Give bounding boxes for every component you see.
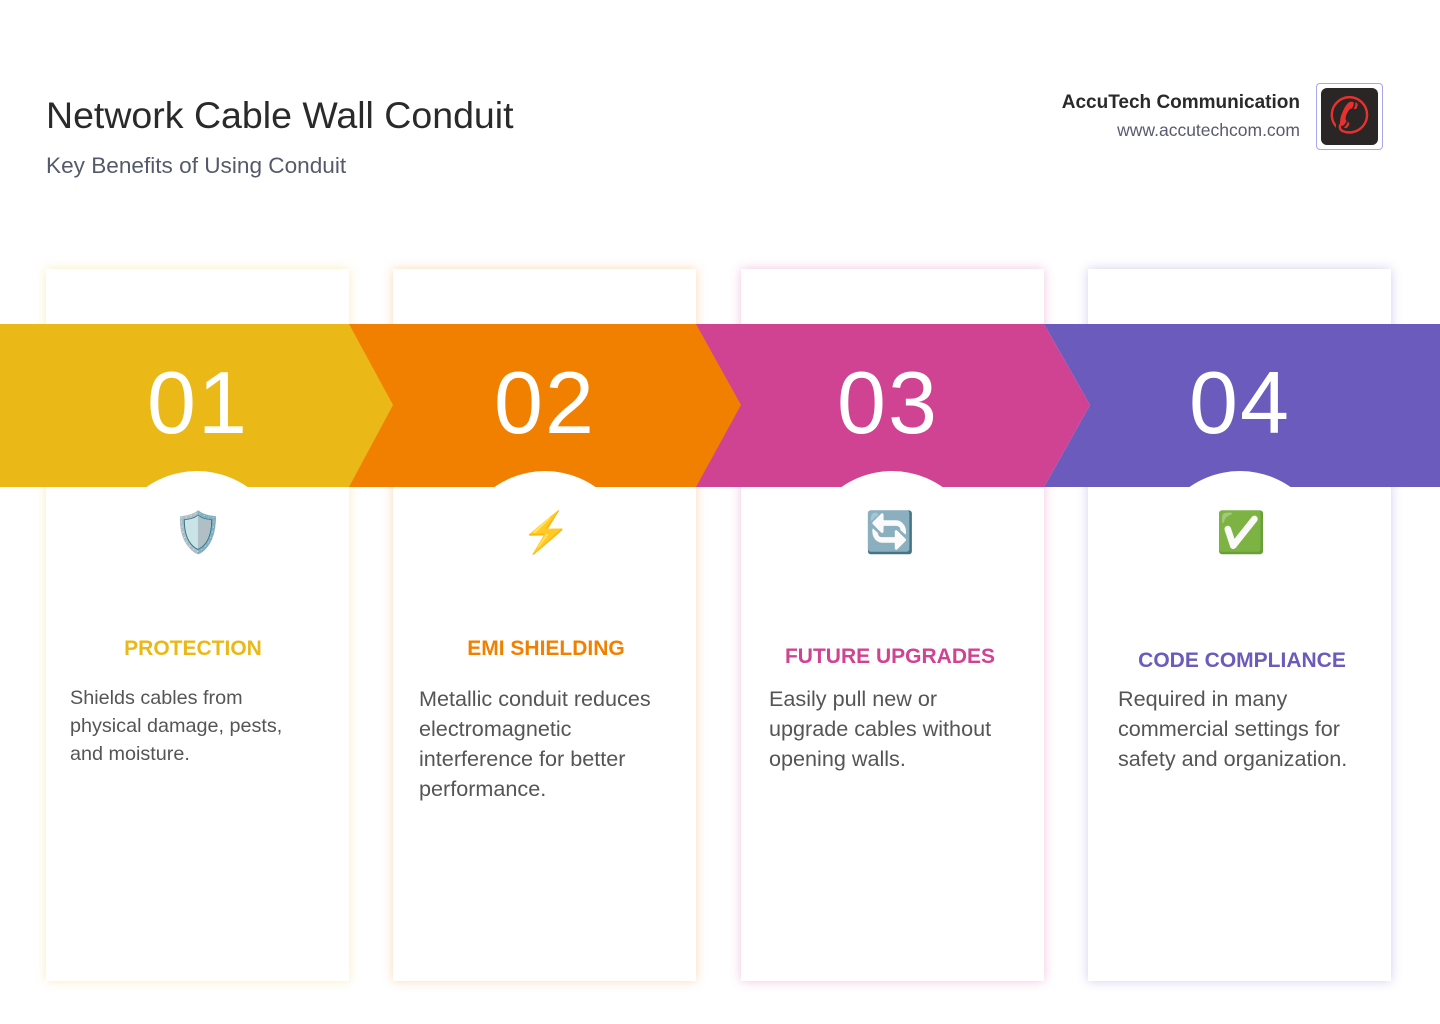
text: future bbox=[769, 686, 991, 771]
subtitle: Key Benefits of Using Conduit bbox=[46, 153, 346, 178]
text: protection: Shields cables from bbox=[70, 687, 243, 709]
icon: shield: 🛡️ bbox=[173, 511, 223, 555]
text: emi: interference for better bbox=[419, 746, 625, 771]
text: protection: and moisture. bbox=[70, 743, 190, 765]
text: code bbox=[1118, 686, 1347, 771]
icon: phone logo: ✆ bbox=[1329, 88, 1370, 144]
text: emi bbox=[419, 686, 651, 801]
text: code: commercial settings for bbox=[1118, 716, 1340, 741]
text: emi: performance. bbox=[419, 776, 546, 801]
icon: check: ✅ bbox=[1216, 511, 1266, 555]
panel: card 2 bbox=[393, 269, 696, 981]
number 02: 02 bbox=[494, 353, 596, 452]
heading: protection: PROTECTION bbox=[124, 637, 262, 660]
text: future: upgrade cables without bbox=[769, 716, 991, 741]
number 03: 03 bbox=[837, 353, 939, 452]
text: future: Easily pull new or bbox=[769, 686, 937, 711]
heading: emi shielding: EMI SHIELDING bbox=[467, 637, 625, 660]
icon: refresh: 🔄 bbox=[865, 511, 915, 555]
text: future: opening walls. bbox=[769, 746, 906, 771]
number 04: 04 bbox=[1189, 353, 1291, 452]
icon: phone logo bbox=[1316, 83, 1383, 150]
number 01: 01 bbox=[147, 353, 249, 452]
panel: card 4 bbox=[1088, 269, 1391, 981]
text: code: safety and organization. bbox=[1118, 746, 1347, 771]
text: emi: Metallic conduit reduces bbox=[419, 686, 651, 711]
brand name: AccuTech Communication bbox=[1062, 92, 1300, 113]
text: code: Required in many bbox=[1118, 686, 1287, 711]
text: protection bbox=[70, 687, 282, 765]
icon: lightning: ⚡ bbox=[521, 511, 571, 555]
text: emi: electromagnetic bbox=[419, 716, 571, 741]
heading: code compliance: CODE COMPLIANCE bbox=[1138, 649, 1346, 672]
heading: future upgrades: FUTURE UPGRADES bbox=[785, 645, 995, 668]
panel: card 3 bbox=[741, 269, 1044, 981]
text: protection: physical damage, pests, bbox=[70, 715, 282, 737]
brand block bbox=[1062, 83, 1383, 150]
title: Network Cable Wall Conduit bbox=[46, 94, 514, 136]
brand url: www.accutechcom.com bbox=[1117, 120, 1300, 140]
panel: card 1 bbox=[46, 269, 349, 981]
